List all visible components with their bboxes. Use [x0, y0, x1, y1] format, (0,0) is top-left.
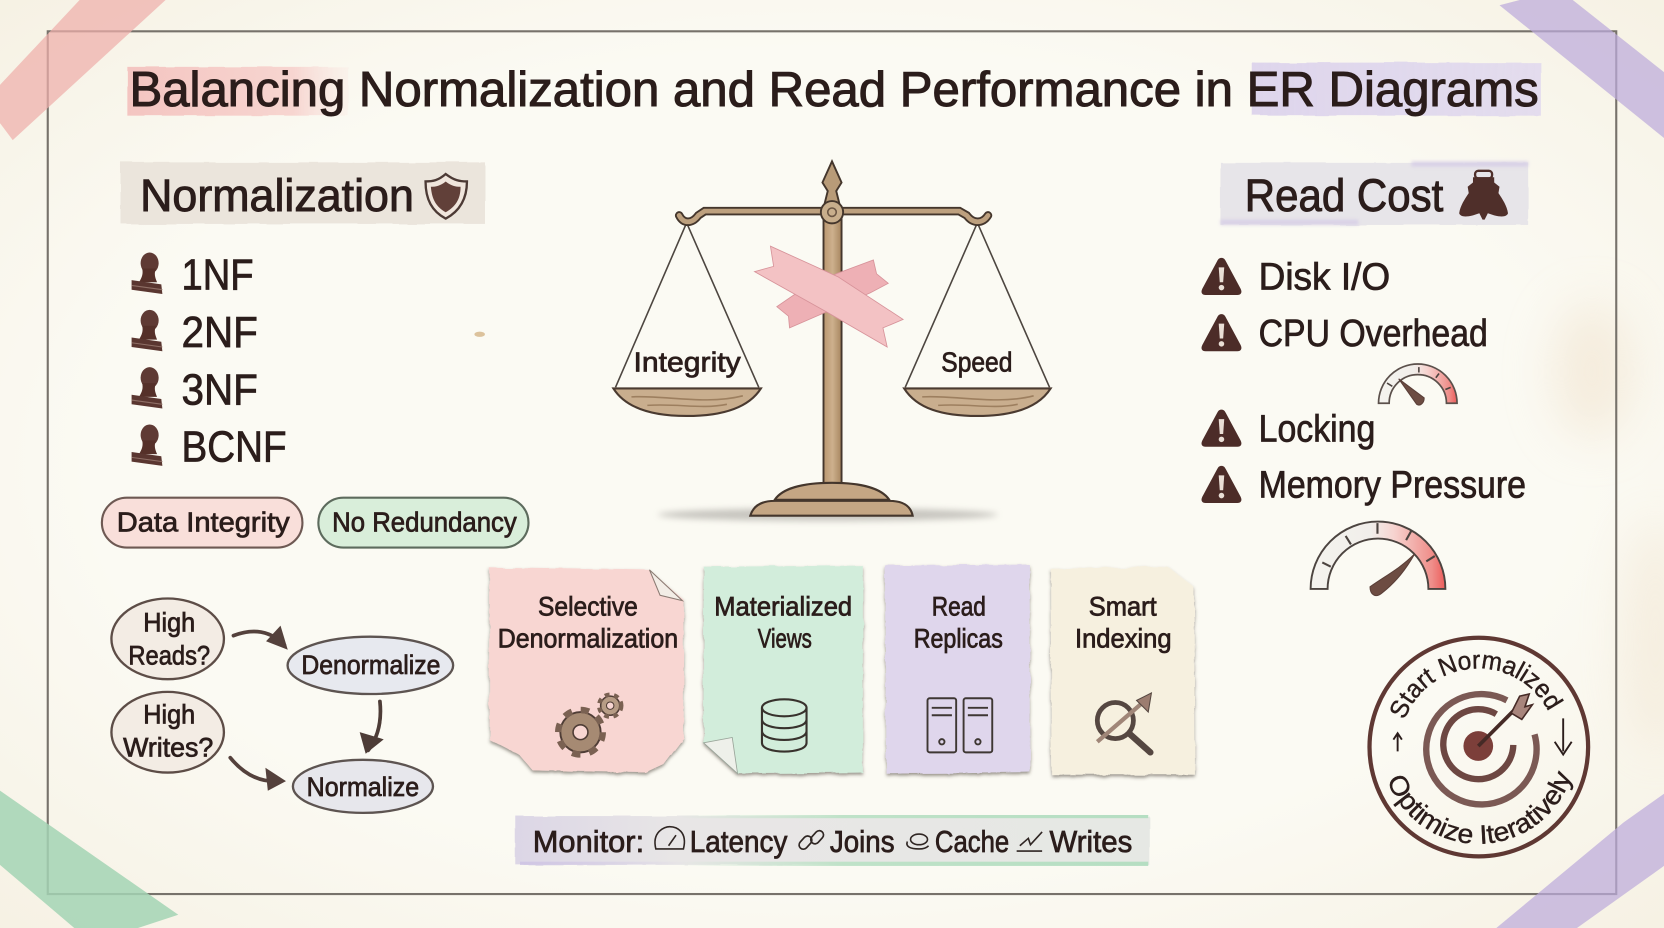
scale strings [616, 223, 1050, 387]
node: high writes: High [143, 700, 195, 730]
cost item: locking: Locking [1259, 407, 1375, 450]
central balance scale [613, 161, 1051, 521]
ribbon front band [755, 246, 903, 347]
title highlight: purple [1252, 63, 1541, 116]
node: high reads: High [143, 607, 195, 637]
card: selective denormalization: Denormalization [498, 623, 678, 653]
icon: gears [558, 695, 621, 754]
title highlight: pink [127, 67, 348, 116]
pill: data integrity: Data Integrity [117, 507, 290, 538]
target rings [1426, 694, 1537, 804]
icon: magnifier with arrow [1097, 693, 1151, 752]
arrow: reads to denormalize [233, 627, 287, 648]
cost item: cpu overhead: CPU Overhead [1259, 312, 1488, 355]
tape: bottom right purple [1496, 794, 1664, 928]
scale finial [822, 161, 842, 204]
metric: joins: Joins [830, 824, 895, 859]
arrow: denormalize to normalize [361, 701, 382, 752]
list item: 2NF [132, 309, 258, 357]
badge ring [1370, 638, 1588, 856]
badge arrow down [1555, 718, 1572, 754]
node: normalize: Normalize [307, 772, 419, 802]
normalization heading: Normalization [140, 170, 414, 221]
card: read replicas [885, 565, 1030, 774]
badge arrow up [1393, 733, 1402, 751]
monitor label: Monitor: [533, 824, 644, 859]
left pan [613, 388, 761, 416]
monitor bar [516, 815, 1149, 866]
list item: BCNF: BCNF [181, 424, 287, 472]
card: materialized views [704, 566, 863, 774]
tape: top right purple [1500, 0, 1664, 138]
badge text: start normalized: Start Normalized [1390, 654, 1564, 718]
list item: 3NF [132, 366, 258, 414]
ribbon back band [777, 260, 888, 328]
pill: no redundancy: No Redundancy [332, 507, 517, 538]
node: high writes: Writes? [123, 733, 213, 763]
metric: cache: Cache [935, 824, 1009, 859]
small gauge [1379, 364, 1457, 405]
node: high writes [111, 692, 224, 773]
scale beam fill [679, 211, 988, 222]
scale base [750, 483, 913, 516]
list item: 1NF: 1NF [181, 252, 254, 300]
normalization heading [121, 162, 485, 224]
card: read replicas: Replicas [914, 623, 1003, 653]
icon: chain link [797, 829, 825, 851]
icon: cache [907, 834, 929, 849]
card: smart indexing [1051, 567, 1195, 775]
right pan [904, 388, 1051, 416]
card: selective denormalization [489, 568, 684, 773]
read cost heading [1220, 161, 1528, 225]
icon: servers [928, 698, 992, 752]
card: selective denormalization: Selective [538, 591, 638, 621]
node: high reads: Reads? [128, 640, 210, 670]
card: materialized views: Views [758, 623, 812, 653]
arrow: writes to normalize [230, 758, 284, 790]
badge text: optimize iteratively: Optimize Iteratively [1390, 770, 1574, 844]
pan label: speed: Speed [941, 346, 1012, 377]
pill: no redundancy [318, 498, 528, 548]
icon: writes [1017, 832, 1042, 851]
scale post [824, 218, 842, 489]
cost item: disk io [1202, 256, 1390, 299]
cost item: locking [1202, 407, 1375, 450]
cost item: disk io: Disk I/O [1259, 256, 1390, 299]
card: materialized views: Materialized [714, 591, 852, 621]
scale shadow [658, 508, 998, 521]
metric: writes: Writes [1050, 824, 1132, 859]
read cost heading: Read Cost [1245, 170, 1444, 221]
scale pivot [821, 201, 843, 223]
node: normalize [293, 760, 433, 813]
tape: bottom left green [0, 791, 178, 928]
list item: BCNF [132, 424, 287, 472]
node: high reads [111, 599, 224, 679]
card: smart indexing: Indexing [1075, 623, 1172, 653]
badge: start normalized, optimize iteratively [1367, 636, 1590, 858]
card: read replicas: Read [932, 591, 986, 621]
card: smart indexing: Smart [1089, 591, 1157, 621]
node: denormalize: Denormalize [301, 650, 440, 680]
pan label: integrity: Integrity [634, 346, 741, 377]
metric: latency: Latency [690, 824, 788, 859]
pill: data integrity [102, 498, 302, 548]
target arrow [1478, 694, 1532, 746]
icon: database [762, 699, 807, 752]
list item: 3NF: 3NF [181, 366, 258, 414]
icon: weight [1459, 171, 1508, 220]
panel: read cost [1202, 161, 1528, 596]
normal forms list [132, 252, 287, 472]
tape: top left pink [0, 0, 166, 140]
node: denormalize [288, 637, 453, 694]
title text: Balancing Normalization and Read Performance in ER Diagrams [129, 63, 1539, 117]
icon: shield [426, 174, 467, 219]
list item: 1NF [132, 252, 254, 300]
icon: latency gauge [655, 827, 684, 849]
target bullseye [1463, 731, 1493, 761]
title [127, 63, 1541, 117]
scale beam [679, 211, 988, 222]
decision flow [111, 599, 453, 813]
list item: 2NF: 2NF [181, 309, 258, 357]
cost item: memory pressure: Memory Pressure [1259, 464, 1526, 507]
panel: normalization [102, 162, 528, 548]
large gauge [1311, 522, 1445, 596]
